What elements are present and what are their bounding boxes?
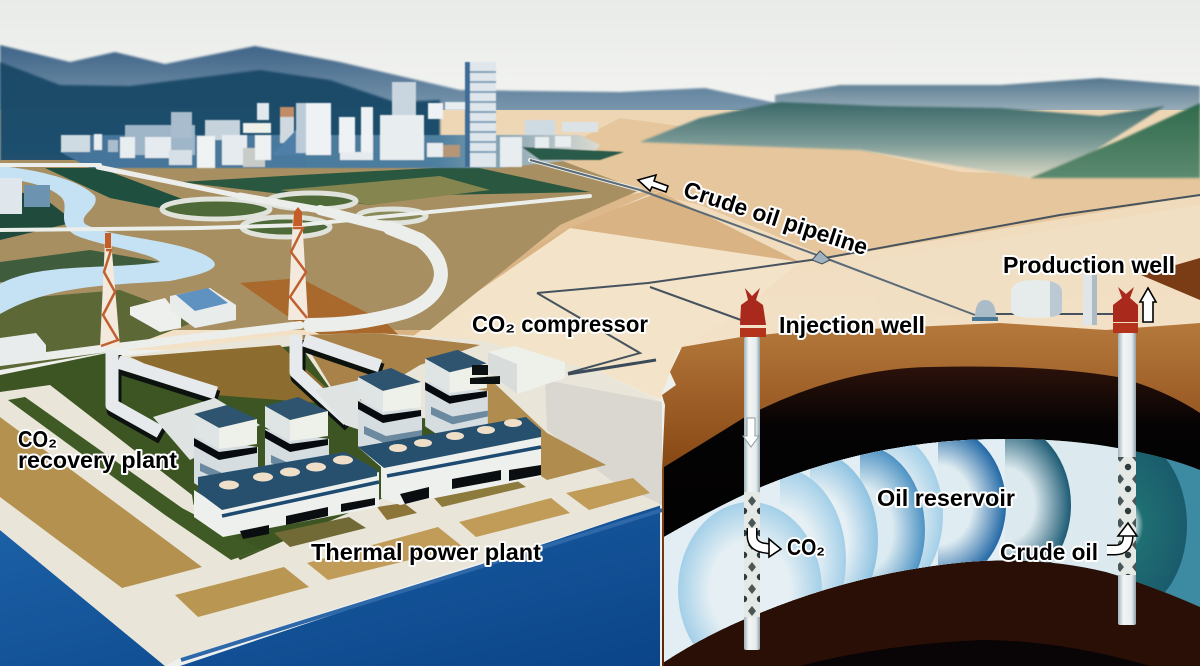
- production well: [1113, 287, 1138, 625]
- turbine hall left: [194, 452, 379, 539]
- label: CO2 recovery plant: [18, 426, 177, 473]
- chimney left: [100, 233, 120, 347]
- roads: [0, 160, 640, 362]
- power plant site: [0, 333, 662, 666]
- label: thermal power plant: Thermal power plant: [311, 539, 541, 565]
- arrow head: CO2: [769, 539, 781, 557]
- label: crude oil pipeline: Crude oil pipeline: [680, 176, 871, 260]
- left factory: [0, 178, 50, 214]
- injection valve: [740, 288, 766, 337]
- injection well: [740, 288, 766, 650]
- landfill plate: [0, 333, 662, 666]
- turbine block rear: [153, 398, 260, 460]
- arrow: CO2 into reservoir: [752, 528, 771, 549]
- outbuildings: [0, 288, 236, 364]
- production valve: [1113, 287, 1138, 333]
- label: CO2: CO₂: [787, 534, 825, 560]
- underground section: [660, 323, 1200, 666]
- arrow: CO2 down: [743, 418, 759, 447]
- bottom black layer: [800, 640, 1150, 666]
- compressor building: [470, 346, 565, 394]
- near dark mountains: [0, 62, 440, 165]
- skyscraper tower: [465, 62, 496, 167]
- chimney right: [288, 207, 308, 320]
- arrow head: crude oil: [1118, 523, 1137, 536]
- label: oil reservoir: Oil reservoir: [877, 485, 1015, 511]
- boilers: [194, 350, 488, 502]
- sea: [0, 505, 660, 666]
- arrow: production up: [1140, 288, 1156, 322]
- city skyline: [60, 62, 624, 168]
- oil reservoir: [660, 423, 1200, 666]
- sky: [0, 0, 1200, 120]
- pipeline junction: [812, 251, 830, 264]
- arrow: crude oil into well: [1107, 534, 1128, 550]
- left valley land: [0, 160, 640, 370]
- label: CO2 recovery plant: CO₂: [18, 426, 57, 452]
- tan farmland: [300, 118, 1200, 400]
- dark rock layer: [664, 366, 1200, 537]
- right hills: [640, 102, 1200, 178]
- label: CO2 compressor: CO₂ compressor: [472, 311, 648, 337]
- fields: [0, 345, 540, 560]
- river: [0, 166, 215, 314]
- production facilities: [972, 273, 1097, 325]
- label: injection well: Injection well: [779, 312, 925, 338]
- ground plain: [0, 110, 1200, 350]
- label: production well: Production well: [1003, 252, 1175, 278]
- lower rock: [664, 560, 1200, 666]
- arrow: pipeline flow: [638, 175, 668, 192]
- far mountains: [0, 45, 1200, 130]
- flue ducts: [112, 335, 382, 437]
- road loops: [162, 193, 426, 237]
- label: CO2 recovery plant: recovery plant: [18, 447, 177, 473]
- label: crude oil: Crude oil: [1000, 539, 1098, 565]
- quay edge: [181, 510, 662, 660]
- pipelines: [530, 160, 1200, 374]
- turbine hall right: [358, 417, 541, 505]
